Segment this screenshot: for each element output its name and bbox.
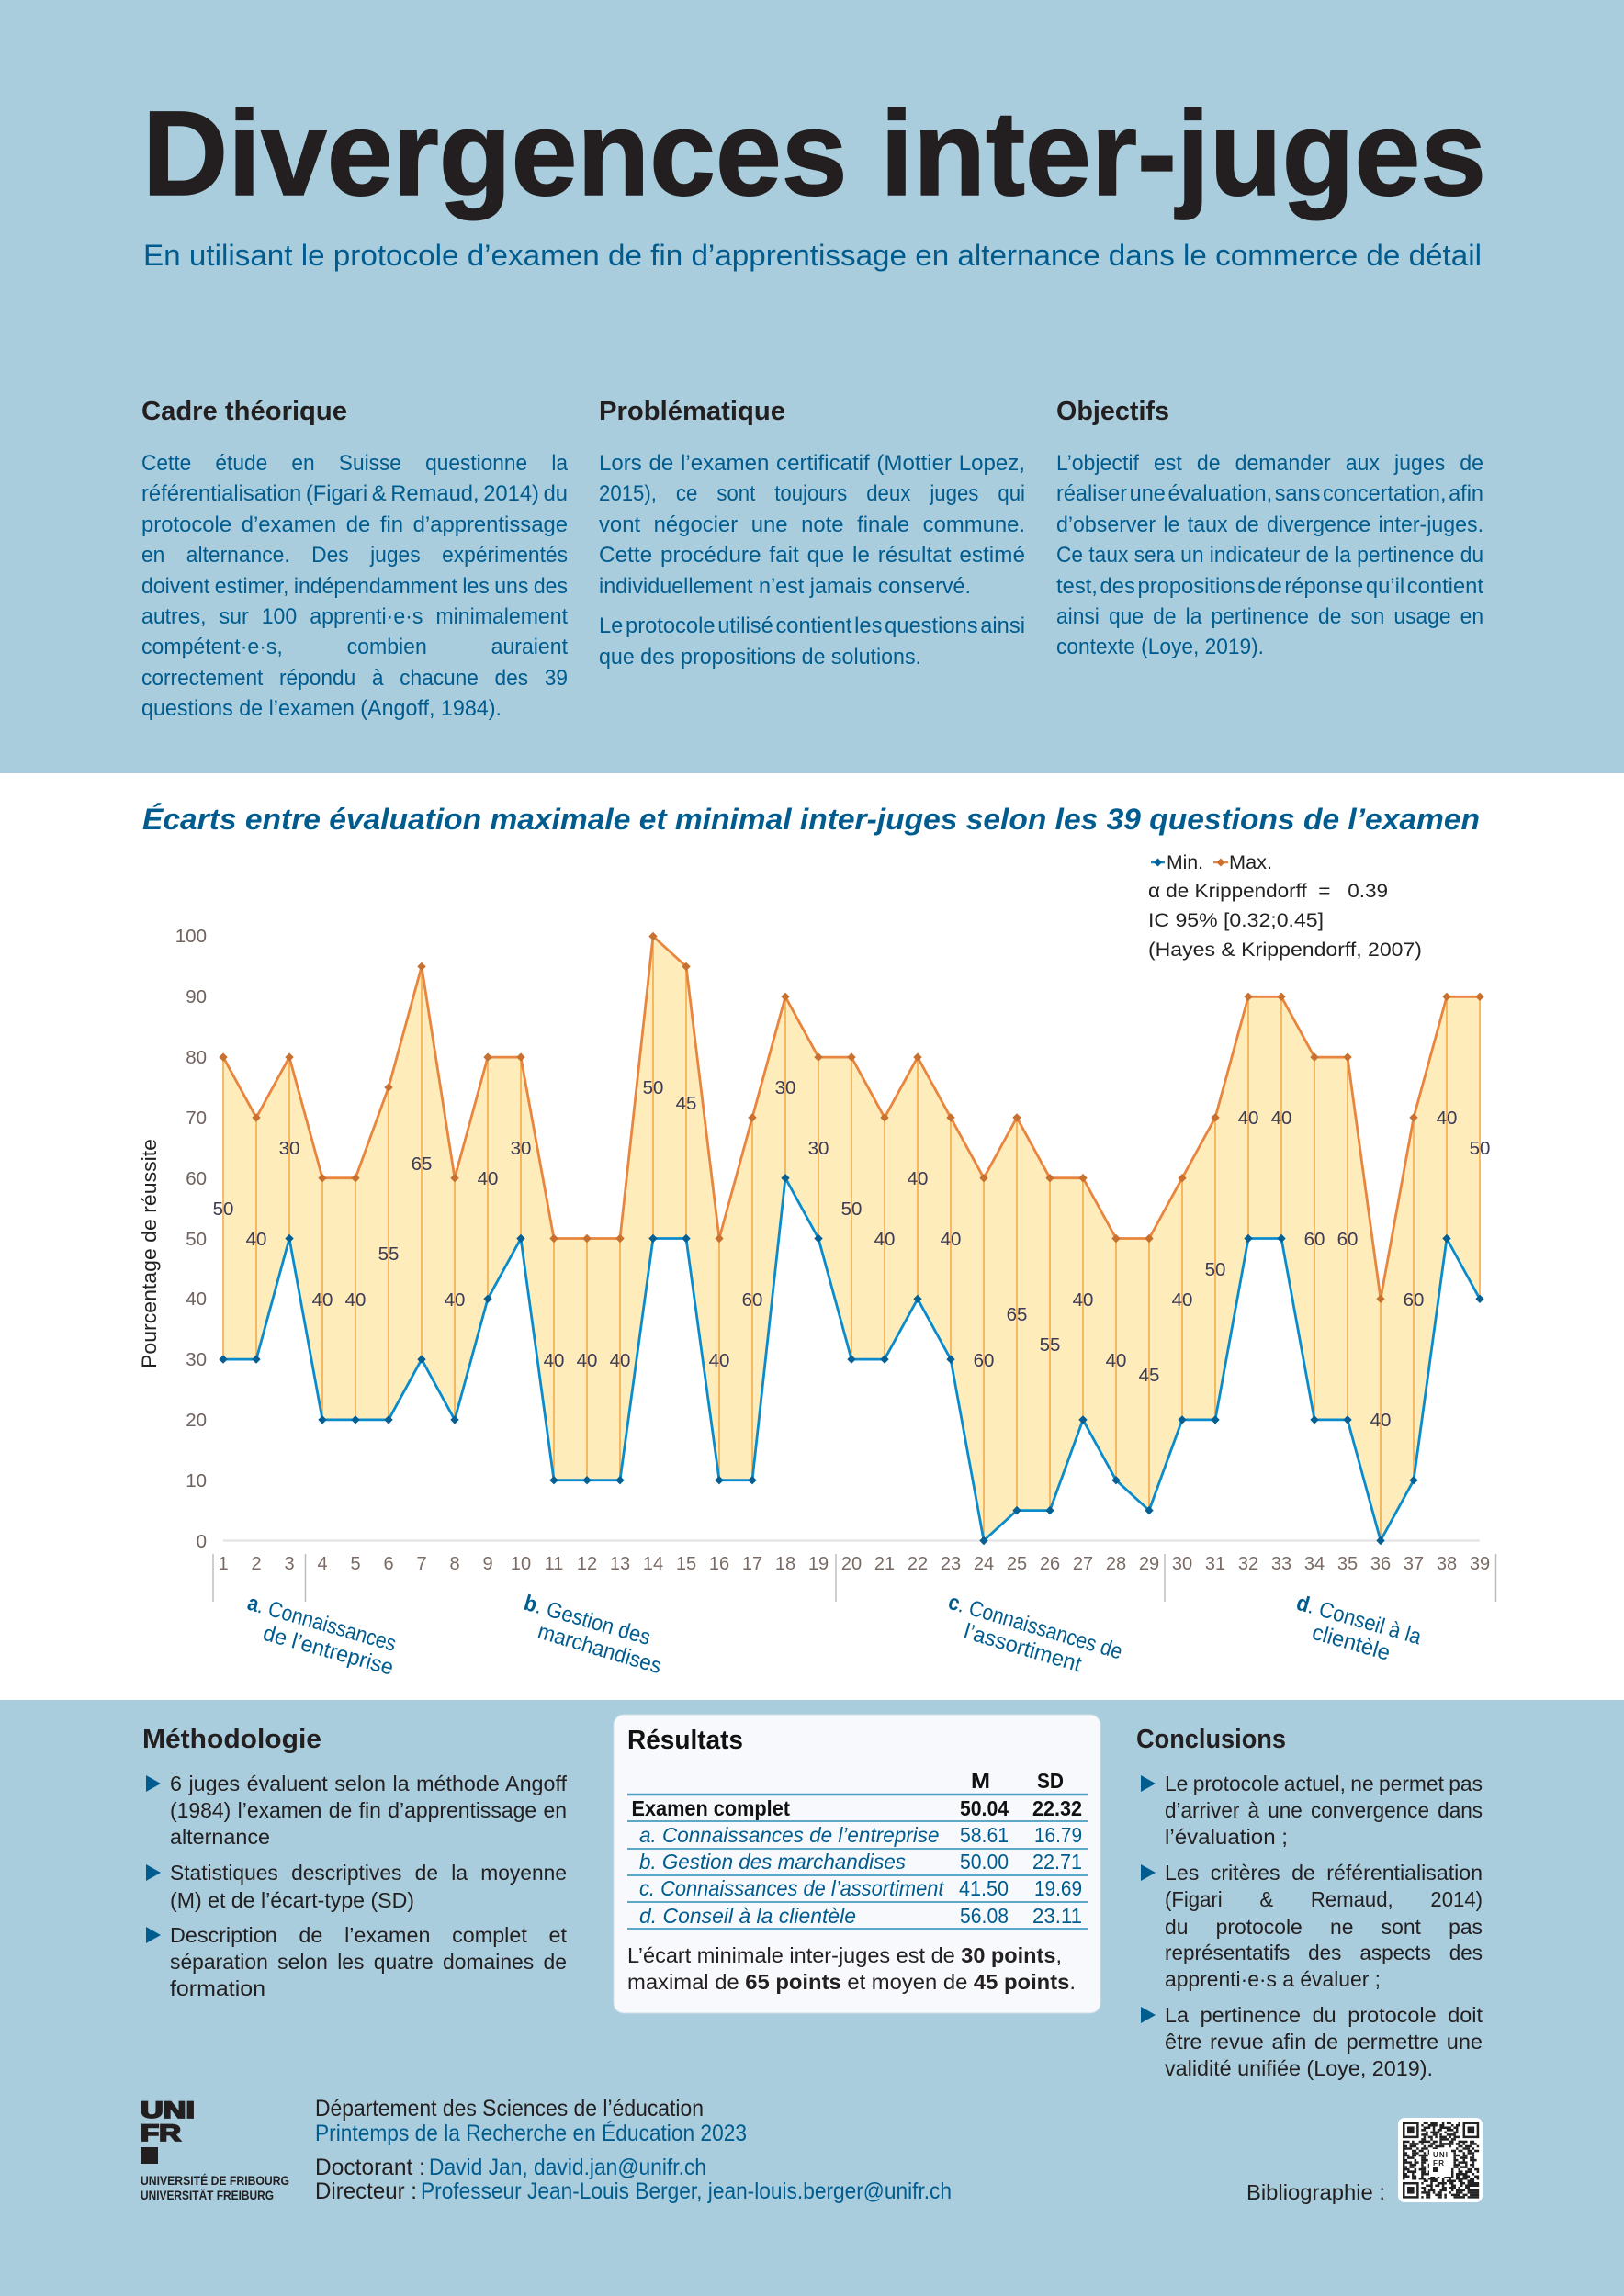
logo: université de fribourg: UNIVERSITÄT FREIBURG bbox=[141, 2188, 274, 2202]
title: Divergences inter-juges bbox=[142, 85, 1486, 220]
text block: objectifs: test, des propositions de réponse qu’il contient bbox=[1056, 574, 1483, 599]
conclusion item 1: Le protocole actuel, ne permet pas bbox=[1165, 1772, 1483, 1795]
gap value labels: 40 bbox=[445, 1289, 465, 1311]
gap value labels: 40 bbox=[908, 1168, 928, 1189]
gap value labels: 60 bbox=[1304, 1229, 1325, 1250]
x axis question numbers: 19 bbox=[808, 1554, 829, 1574]
domain label d: clientèle bbox=[1309, 1620, 1393, 1666]
note: krippendorff statistics: IC 95% [0.32;0.45] bbox=[1148, 910, 1324, 931]
x axis question numbers: 30 bbox=[1172, 1554, 1192, 1574]
y axis labels: 40 bbox=[186, 1289, 207, 1310]
conclusion item 2 bbox=[1141, 1861, 1483, 1991]
results summary text bbox=[627, 1943, 1076, 1994]
y axis labels: 30 bbox=[186, 1349, 207, 1370]
y axis labels: 0 bbox=[197, 1531, 207, 1552]
x axis question numbers: 23 bbox=[941, 1554, 961, 1574]
gap value labels: 50 bbox=[213, 1199, 233, 1220]
bullet item 2 bbox=[146, 1861, 567, 1912]
range fill bbox=[223, 937, 1480, 1541]
text block: cadre théorique: en alternance. Des juges expérimentés bbox=[141, 543, 568, 568]
y axis labels: 80 bbox=[186, 1047, 207, 1068]
bibliography label: Bibliographie : bbox=[1246, 2180, 1385, 2204]
panel: méthodologie bbox=[142, 1725, 568, 2000]
conclusion item 2: représentatifs des aspects des bbox=[1165, 1941, 1483, 1964]
heading: conclusions: Conclusions bbox=[1136, 1725, 1286, 1754]
table: statistics: 22.71 bbox=[1032, 1850, 1082, 1874]
text block: problématique: Le protocole utilisé contient les questions ainsi bbox=[599, 613, 1025, 638]
gap value labels: 40 bbox=[1271, 1108, 1291, 1129]
gap value labels: 65 bbox=[1007, 1304, 1027, 1325]
domain label d: d. Conseil à la bbox=[1293, 1591, 1425, 1650]
x axis question numbers: 1 bbox=[218, 1554, 229, 1574]
x axis question numbers: 2 bbox=[251, 1554, 262, 1574]
x axis question numbers: 39 bbox=[1470, 1554, 1490, 1574]
x axis question numbers: 3 bbox=[284, 1554, 295, 1574]
x axis question numbers: 26 bbox=[1040, 1554, 1060, 1574]
gap value labels: 30 bbox=[279, 1138, 299, 1159]
panel: problématique bbox=[599, 397, 1025, 670]
x axis question numbers: 32 bbox=[1238, 1554, 1258, 1574]
text block: cadre théorique: correctement répondu à chacune des 39 bbox=[141, 666, 568, 691]
text block: problématique: Cette procédure fait que le résultat estimé bbox=[599, 543, 1025, 568]
text block: problématique: que des propositions de solutions. bbox=[599, 645, 921, 670]
domain label a: a. Connaissances bbox=[244, 1591, 399, 1657]
table: statistics: SD bbox=[1037, 1769, 1064, 1793]
y axis labels: 100 bbox=[175, 926, 207, 947]
heading: objectifs: Objectifs bbox=[1056, 397, 1169, 426]
text block: problématique bbox=[599, 451, 1025, 670]
table: statistics: 56.08 bbox=[960, 1904, 1009, 1928]
logo: université de fribourg: UNI bbox=[141, 2098, 195, 2123]
text block: problématique: Lors de l’examen certificatif (Mottier Lopez, bbox=[599, 451, 1025, 476]
x axis question numbers: 34 bbox=[1304, 1554, 1325, 1574]
conclusion item 2: Les critères de référentialisation bbox=[1165, 1861, 1483, 1885]
x axis question numbers: 13 bbox=[610, 1554, 630, 1574]
gap value labels: 40 bbox=[1172, 1289, 1192, 1311]
footer: institution and authors: Département des Sciences de l’éducation bbox=[315, 2096, 704, 2122]
chart legend and Krippendorff note bbox=[1148, 852, 1422, 961]
y axis labels: 70 bbox=[186, 1108, 207, 1129]
gap value labels: 40 bbox=[1437, 1108, 1457, 1129]
gap value labels: 40 bbox=[941, 1229, 961, 1250]
y axis title: Pourcentage de réussite bbox=[138, 1139, 161, 1368]
heading: résultats: Résultats bbox=[627, 1726, 743, 1755]
text block: objectifs: réaliser une évaluation, sans concertation, afin bbox=[1056, 481, 1483, 506]
x axis question numbers: 10 bbox=[511, 1554, 531, 1574]
logo: université de fribourg bbox=[141, 2098, 289, 2202]
series: min bbox=[223, 1178, 1480, 1541]
heading: cadre théorique: Cadre théorique bbox=[141, 397, 347, 426]
gap value labels: 40 bbox=[577, 1350, 597, 1371]
gap value labels: 40 bbox=[1073, 1289, 1093, 1311]
x axis question numbers: 31 bbox=[1205, 1554, 1225, 1574]
gap value labels: 50 bbox=[1205, 1259, 1225, 1280]
text block: problématique: 2015), ce sont toujours deux juges qui bbox=[599, 481, 1025, 506]
gap value labels: 60 bbox=[1404, 1289, 1424, 1311]
results summary text: L’écart minimale inter-juges est de 30 points, bbox=[627, 1943, 1062, 1967]
x axis question numbers: 18 bbox=[775, 1554, 795, 1574]
domain label b: marchandises bbox=[535, 1619, 664, 1679]
heading: problématique: Problématique bbox=[599, 397, 785, 426]
heading: méthodologie: Méthodologie bbox=[142, 1725, 321, 1754]
bullet item 3: Description de l’examen complet et bbox=[170, 1923, 568, 1947]
x axis question numbers: 38 bbox=[1437, 1554, 1457, 1574]
gap value labels: 30 bbox=[511, 1138, 531, 1159]
table: statistics: c. Connaissances de l’assortiment bbox=[639, 1876, 945, 1900]
x axis question numbers: 5 bbox=[350, 1554, 361, 1574]
gap value labels: 40 bbox=[246, 1229, 266, 1250]
text block: cadre théorique: autres, sur 100 apprenti·e·s minimalement bbox=[141, 604, 568, 629]
icon: QR code bbox=[1398, 2118, 1483, 2202]
panel: cadre théorique bbox=[141, 397, 569, 721]
legend: min bbox=[1151, 852, 1203, 873]
x axis question numbers: 20 bbox=[841, 1554, 862, 1574]
gap value labels: 45 bbox=[676, 1093, 696, 1114]
text block: problématique: vont négocier une note finale commune. bbox=[599, 512, 1025, 537]
table: statistics: 50.00 bbox=[960, 1850, 1009, 1874]
gap value labels: 40 bbox=[544, 1350, 564, 1371]
x axis question numbers: 28 bbox=[1106, 1554, 1126, 1574]
y axis labels: 50 bbox=[186, 1229, 207, 1250]
x axis question numbers: 8 bbox=[449, 1554, 460, 1574]
results summary text: maximal de 65 points et moyen de 45 points. bbox=[627, 1970, 1076, 1994]
panel: conclusions bbox=[1136, 1725, 1483, 2080]
x axis question numbers: 9 bbox=[482, 1554, 493, 1574]
gap value labels: 55 bbox=[1040, 1334, 1060, 1356]
background: white chart band bbox=[0, 773, 1624, 1700]
text block: cadre théorique: référentialisation (Figari & Remaud, 2014) du bbox=[141, 481, 568, 506]
gap value labels: 45 bbox=[1139, 1365, 1159, 1386]
gap value labels: 40 bbox=[312, 1289, 333, 1311]
table: statistics: 22.32 bbox=[1032, 1796, 1082, 1820]
footer: institution and authors: Directeur : bbox=[315, 2178, 417, 2204]
bullet item 1: (1984) l’examen de fin d’apprentissage en bbox=[170, 1798, 567, 1822]
y axis labels: 60 bbox=[186, 1168, 207, 1189]
gap value labels: 65 bbox=[412, 1154, 432, 1175]
conclusion item 3: validité unifiée (Loye, 2019). bbox=[1165, 2056, 1433, 2080]
text block: cadre théorique bbox=[141, 451, 569, 721]
gap value labels: 40 bbox=[1106, 1350, 1126, 1371]
x axis question numbers: 6 bbox=[383, 1554, 394, 1574]
gap value labels: 60 bbox=[1337, 1229, 1358, 1250]
y axis labels: 20 bbox=[186, 1410, 207, 1431]
note: krippendorff statistics: (Hayes & Krippendorff, 2007) bbox=[1148, 940, 1422, 961]
footer: institution and authors: Printemps de la Recherche en Éducation 2023 bbox=[315, 2120, 747, 2146]
text block: objectifs: L’objectif est de demander aux juges de bbox=[1056, 451, 1483, 476]
legend: min: Min. bbox=[1167, 852, 1203, 873]
gap value labels: 55 bbox=[378, 1244, 399, 1265]
bullet item 1: 6 juges évaluent selon la méthode Angoff bbox=[170, 1772, 568, 1795]
note: krippendorff statistics: α de Krippendorff = 0.39 bbox=[1148, 881, 1388, 902]
table: statistics: Examen complet bbox=[632, 1796, 790, 1820]
y axis labels: 10 bbox=[186, 1470, 207, 1491]
gap value labels: 30 bbox=[808, 1138, 829, 1159]
x axis question numbers: 21 bbox=[874, 1554, 895, 1574]
series: max bbox=[223, 937, 1480, 1299]
x axis question numbers: 14 bbox=[643, 1554, 663, 1574]
conclusion item 3: La pertinence du protocole doit bbox=[1165, 2003, 1483, 2027]
x axis question numbers: 36 bbox=[1370, 1554, 1391, 1574]
gap value labels: 60 bbox=[974, 1350, 994, 1371]
text block: cadre théorique: questions de l’examen (Angoff, 1984). bbox=[141, 696, 502, 721]
x axis question numbers: 35 bbox=[1337, 1554, 1358, 1574]
table: statistics: d. Conseil à la clientèle bbox=[639, 1904, 856, 1928]
gap value labels: 40 bbox=[1370, 1410, 1391, 1431]
icon: QR code: UNI bbox=[1433, 2151, 1448, 2159]
table: statistics: 23.11 bbox=[1032, 1904, 1082, 1928]
domain label a: de l’entreprise bbox=[260, 1621, 396, 1681]
bullet item 2: Statistiques descriptives de la moyenne bbox=[170, 1861, 567, 1885]
bullet item 3 bbox=[146, 1923, 568, 2000]
table: statistics bbox=[627, 1769, 1088, 1929]
conclusion item 1 bbox=[1141, 1772, 1483, 1849]
y axis labels: 90 bbox=[186, 986, 207, 1007]
x axis question numbers: 15 bbox=[676, 1554, 696, 1574]
domain label c: c. Connaissances de bbox=[945, 1590, 1125, 1664]
table: statistics: M bbox=[971, 1769, 990, 1793]
logo: université de fribourg: UNIVERSITÉ DE FRIBOURG bbox=[141, 2173, 289, 2188]
table: statistics: 58.61 bbox=[960, 1823, 1009, 1847]
panel: objectifs bbox=[1056, 397, 1483, 659]
conclusion item 1: d’arriver à une convergence dans bbox=[1165, 1798, 1483, 1822]
x axis question numbers bbox=[218, 1554, 1490, 1574]
bullet item 3: formation bbox=[170, 1976, 265, 2000]
text block: cadre théorique: Cette étude en Suisse questionne la bbox=[141, 451, 569, 476]
x axis question numbers: 22 bbox=[908, 1554, 928, 1574]
footer: institution and authors: Professeur Jean-Louis Berger, jean-louis.berger@unifr.ch bbox=[421, 2178, 952, 2204]
x axis question numbers: 12 bbox=[577, 1554, 597, 1574]
text block: cadre théorique: doivent estimer, indépendamment les uns des bbox=[141, 574, 568, 599]
legend: max: Max. bbox=[1229, 852, 1272, 873]
table: statistics: a. Connaissances de l’entreprise bbox=[639, 1823, 939, 1847]
table: statistics: 41.50 bbox=[959, 1876, 1009, 1900]
chart heading: Écarts entre évaluation maximale et minimal inter-juges selon les 39 questions de l’examen bbox=[142, 802, 1480, 836]
icon: QR code: FR bbox=[1433, 2159, 1444, 2167]
text block: objectifs: Ce taux sera un indicateur de la pertinence du bbox=[1056, 543, 1483, 568]
y axis labels bbox=[175, 926, 207, 1552]
footer: institution and authors: David Jan, david.jan@unifr.ch bbox=[429, 2155, 706, 2180]
x axis question numbers: 25 bbox=[1007, 1554, 1027, 1574]
x axis question numbers: 16 bbox=[709, 1554, 729, 1574]
gap value labels: 40 bbox=[1238, 1108, 1258, 1129]
x axis question numbers: 7 bbox=[416, 1554, 427, 1574]
text block: cadre théorique: compétent·e·s, combien auraient bbox=[141, 635, 568, 659]
text block: objectifs: ainsi que de la pertinence de son usage en bbox=[1056, 604, 1483, 629]
text block: problématique: individuellement n’est jamais conservé. bbox=[599, 574, 971, 599]
gap value labels: 50 bbox=[1470, 1138, 1490, 1159]
gap value labels: 40 bbox=[345, 1289, 366, 1311]
x axis question numbers: 27 bbox=[1073, 1554, 1093, 1574]
gap value labels: 50 bbox=[841, 1199, 862, 1220]
gap value labels: 60 bbox=[742, 1289, 762, 1311]
panel: résultats bbox=[614, 1715, 1100, 2013]
gap value labels: 40 bbox=[709, 1350, 729, 1371]
note: krippendorff statistics bbox=[1148, 881, 1422, 961]
text block: objectifs bbox=[1056, 451, 1483, 659]
text block: objectifs: contexte (Loye, 2019). bbox=[1056, 635, 1264, 659]
conclusion item 2: (Figari & Remaud, 2014) bbox=[1165, 1887, 1483, 1911]
logo: université de fribourg: FR bbox=[141, 2121, 181, 2146]
gap value labels: 30 bbox=[775, 1077, 795, 1098]
x axis question numbers: 17 bbox=[742, 1554, 762, 1574]
conclusion item 3 bbox=[1141, 2003, 1483, 2080]
domain label c: l’assortiment bbox=[961, 1619, 1085, 1677]
table: statistics: 16.79 bbox=[1034, 1823, 1082, 1847]
gap value labels: 40 bbox=[610, 1350, 630, 1371]
conclusion item 2: apprenti·e·s a évaluer ; bbox=[1165, 1967, 1381, 1991]
results card bbox=[614, 1715, 1100, 2013]
table: statistics: 19.69 bbox=[1034, 1876, 1082, 1900]
high-low lines bbox=[223, 937, 1480, 1541]
x axis question numbers: 4 bbox=[317, 1554, 328, 1574]
x axis question numbers: 37 bbox=[1404, 1554, 1424, 1574]
x axis line bbox=[223, 1539, 1480, 1542]
table: statistics: b. Gestion des marchandises bbox=[639, 1850, 906, 1874]
bullet item 1: alternance bbox=[170, 1825, 270, 1849]
text block: objectifs: d’observer le taux de divergence inter-juges. bbox=[1056, 512, 1483, 537]
bullet item 2: (M) et de l’écart-type (SD) bbox=[170, 1888, 414, 1912]
bullet item 1 bbox=[146, 1772, 568, 1849]
footer: institution and authors bbox=[315, 2096, 952, 2204]
x axis question numbers: 24 bbox=[974, 1554, 994, 1574]
chart: min-max range area bbox=[213, 937, 1490, 1541]
x axis question numbers: 29 bbox=[1139, 1554, 1159, 1574]
x axis question numbers: 33 bbox=[1271, 1554, 1291, 1574]
conclusion item 2: du protocole ne sont pas bbox=[1165, 1915, 1483, 1939]
domain label b: b. Gestion des bbox=[521, 1591, 653, 1650]
gap value labels: 40 bbox=[874, 1229, 895, 1250]
table: statistics: 50.04 bbox=[960, 1796, 1009, 1820]
gap value labels: 50 bbox=[643, 1077, 663, 1098]
gap value labels: 40 bbox=[478, 1168, 498, 1189]
conclusion item 3: être revue afin de permettre une bbox=[1165, 2030, 1483, 2054]
footer: institution and authors: Doctorant : bbox=[315, 2155, 425, 2180]
subtitle: En utilisant le protocole d’examen de fin d’apprentissage en alternance dans le commerce de détail bbox=[143, 239, 1482, 272]
x axis question numbers: 11 bbox=[545, 1554, 563, 1574]
conclusion item 1: l’évaluation ; bbox=[1165, 1825, 1288, 1849]
bullet item 3: séparation selon les quatre domaines de bbox=[170, 1950, 567, 1974]
text block: cadre théorique: protocole d’examen de fin d’apprentissage bbox=[141, 512, 568, 537]
gap value labels bbox=[213, 1077, 1490, 1431]
